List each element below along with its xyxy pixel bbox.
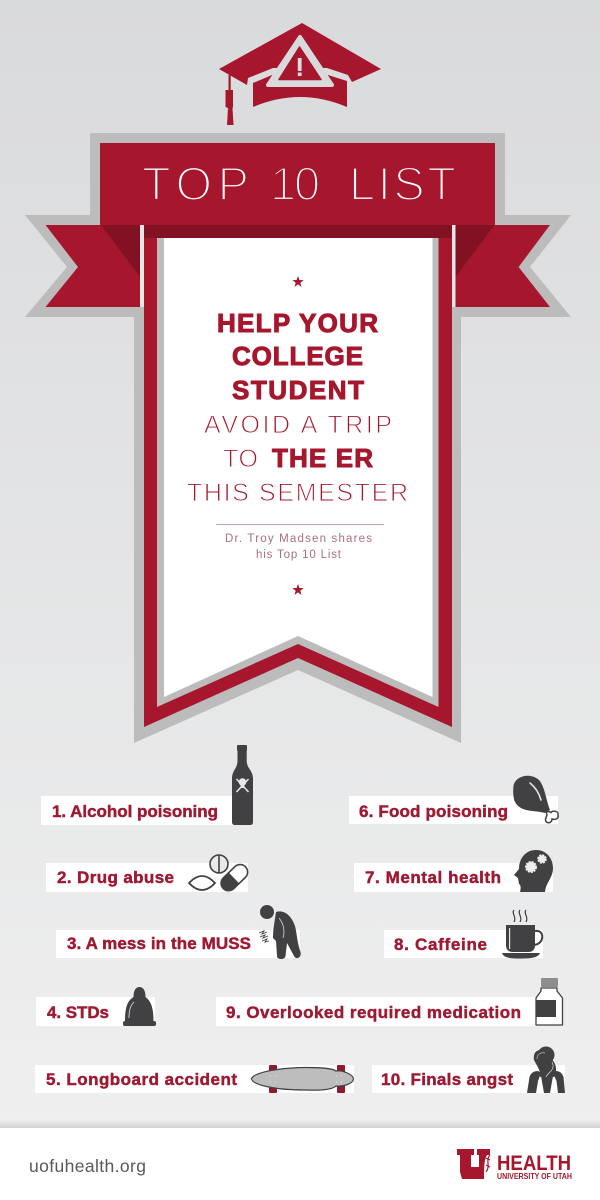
item 10: finals angst: 10. Finals angst: [381, 1070, 513, 1089]
icon: chicken drumstick: [513, 776, 558, 823]
item 3: a mess in the MUSS: 3. A mess in the MUSS: [67, 934, 251, 953]
icon: bottle with skull: [232, 745, 253, 825]
icon: top star: [292, 276, 304, 287]
headline: THE ER: [272, 443, 373, 473]
item 9: overlooked required medication: 9. Overlooked required medication: [226, 1003, 521, 1022]
headline: STUDENT: [232, 375, 364, 405]
icon: bottom star: [292, 584, 304, 595]
headline: AVOID A TRIP: [204, 411, 392, 439]
item 4: STDs: 4. STDs: [47, 1003, 109, 1022]
item 7: mental health: [354, 850, 553, 892]
title: TOP: [142, 157, 249, 210]
website address: uofuhealth.org: [29, 1156, 146, 1176]
icon: coffee cup: [502, 910, 542, 958]
item 7: mental health: 7. Mental health: [365, 868, 501, 887]
item 8: caffeine: [384, 910, 543, 958]
logo: University of Utah Health: UNIVERSITY OF UTAH: [497, 1172, 572, 1181]
logo: University of Utah Health: [457, 1149, 572, 1181]
title: 10: [270, 157, 320, 210]
item 9: overlooked required medication: [216, 978, 562, 1026]
item 5: longboard accident: 5. Longboard accident: [46, 1070, 237, 1089]
byline: Dr. Troy Madsen shares: [225, 533, 372, 545]
item 6: food poisoning: [349, 776, 558, 824]
item 1: alcohol poisoning: [41, 745, 253, 825]
byline: [216, 524, 384, 561]
icon: medicine bottle: [536, 978, 562, 1025]
item 4: STDs: [36, 987, 156, 1026]
icon: head with gears: [514, 850, 553, 892]
item 2: drug abuse: [46, 855, 251, 894]
headline: [187, 308, 408, 507]
item 3: a mess in the MUSS: [56, 905, 301, 959]
item 5: longboard accident: [35, 1065, 354, 1093]
item 6: food poisoning: 6. Food poisoning: [359, 802, 508, 821]
icon: seated stressed figure: [527, 1046, 565, 1093]
item 2: drug abuse: 2. Drug abuse: [57, 868, 174, 887]
headline: HELP YOUR: [217, 308, 378, 338]
headline: COLLEGE: [232, 341, 363, 371]
footer bar: [0, 1120, 600, 1200]
ribbon banner: [25, 133, 571, 743]
headline: THIS SEMESTER: [187, 479, 408, 507]
icon: pills: [189, 855, 251, 894]
icon: condom: [123, 987, 156, 1026]
item 8: caffeine: 8. Caffeine: [394, 935, 487, 954]
byline: his Top 10 List: [256, 549, 342, 561]
logo: University of Utah Health: HEALTH: [497, 1152, 571, 1175]
item 1: alcohol poisoning: 1. Alcohol poisoning: [52, 802, 218, 821]
title: LIST: [349, 157, 456, 210]
icon: person with stomach cramp: [259, 905, 301, 959]
item 10: finals angst: [372, 1046, 565, 1093]
icon: longboard: [252, 1065, 354, 1093]
headline: TO: [223, 445, 258, 473]
icon: graduation cap with warning triangle: [219, 23, 381, 125]
title: [142, 157, 456, 210]
